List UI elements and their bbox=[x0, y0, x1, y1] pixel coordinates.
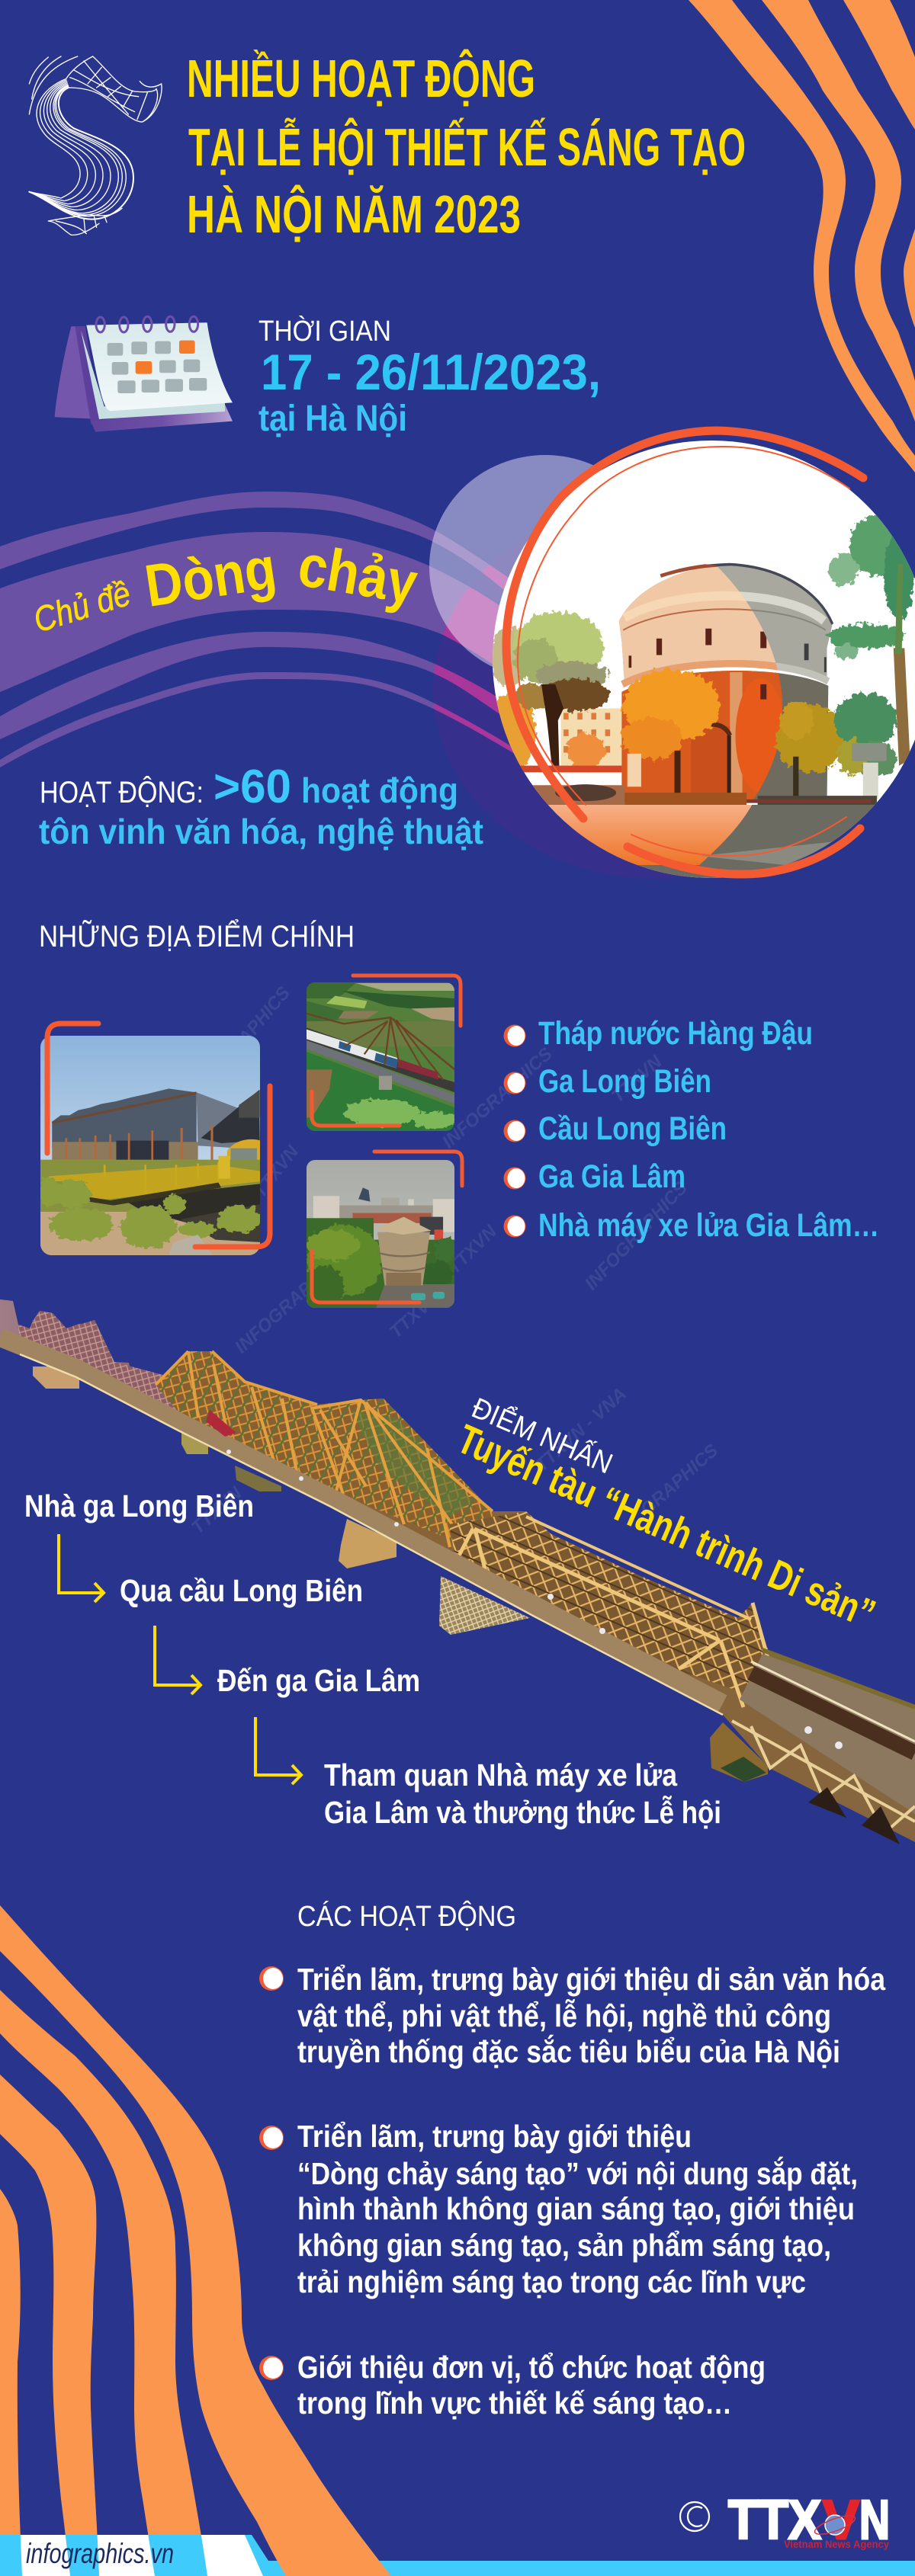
list: main venues: Ga Gia Lâm bbox=[538, 1158, 685, 1195]
watermarks: INFOGRAPHICS bbox=[231, 1248, 349, 1357]
image: Long Bien bridge bbox=[0, 1299, 915, 1844]
logo: TTXVN: N bbox=[859, 2490, 890, 2551]
translucent circle bbox=[429, 455, 661, 679]
icon: calendar bbox=[55, 316, 233, 432]
grass clumps bbox=[39, 1176, 261, 1248]
list: activities: trải nghiệm sáng tạo trong các lĩnh vực bbox=[297, 2264, 806, 2299]
background trees and buildings bbox=[486, 612, 623, 773]
cyclists on deck bbox=[226, 1450, 843, 1749]
list: activities: Triển lãm, trưng bày giới thiệu bbox=[297, 2119, 692, 2154]
dark purple halo behind photo bbox=[433, 501, 878, 879]
decorative stripes top right bbox=[689, 0, 915, 473]
watermarks: TTXVN - VNA bbox=[531, 1384, 631, 1475]
lower field bbox=[307, 1052, 454, 1132]
bridge piers bbox=[33, 1366, 768, 1782]
theme heading: Chủ đề bbox=[29, 573, 135, 640]
list: activities: trong lĩnh vực thiết kế sáng tạo… bbox=[297, 2385, 732, 2421]
logo: TTXVN bbox=[680, 2490, 890, 2551]
bullet bbox=[503, 1168, 526, 1189]
footer strip bbox=[0, 2535, 915, 2576]
theme heading bbox=[29, 531, 422, 640]
near truss bbox=[449, 1511, 769, 1700]
activities count text: hoạt động bbox=[301, 771, 458, 810]
title: NHIỀU HOẠT ĐỘNG bbox=[187, 48, 535, 108]
bullet bbox=[503, 1024, 526, 1047]
deck bbox=[0, 1338, 723, 1715]
activities count text bbox=[39, 761, 483, 851]
train bbox=[307, 1030, 398, 1069]
bullet bbox=[503, 1120, 526, 1142]
text: highlight train route bbox=[451, 1390, 881, 1637]
watermarks bbox=[188, 982, 722, 1538]
route steps with arrows bbox=[24, 1488, 721, 1830]
route steps with arrows: Đến ga Gia Lâm bbox=[217, 1663, 420, 1698]
flowing theme bands bbox=[0, 492, 518, 767]
text: highlight train route: ĐIỂM NHẤN bbox=[467, 1390, 618, 1480]
text block: time and place: 17 - 26/11/2023, bbox=[261, 344, 601, 400]
tower, gray side bbox=[619, 565, 833, 684]
watermarks: TTXVN bbox=[249, 1142, 303, 1202]
route steps with arrows: Tham quan Nhà máy xe lửa bbox=[324, 1757, 678, 1793]
lower truss bbox=[732, 1721, 915, 1833]
list: activities: không gian sáng tạo, sản phẩm sáng tạo, bbox=[297, 2228, 831, 2263]
central truss bbox=[156, 1351, 493, 1555]
footer white block with stripes bbox=[0, 2535, 263, 2576]
list: activities: Giới thiệu đơn vị, tổ chức hoạt động bbox=[297, 2350, 766, 2385]
arrow bbox=[155, 1626, 201, 1694]
route steps with arrows: Qua cầu Long Biên bbox=[120, 1573, 363, 1608]
bridge body bbox=[0, 1299, 915, 1842]
text block: time and place: THỜI GIAN bbox=[258, 315, 391, 348]
watermarks: TTXVN bbox=[188, 1482, 246, 1538]
bullet bbox=[503, 1072, 526, 1094]
arrow bbox=[59, 1534, 104, 1602]
deck bbox=[307, 1040, 454, 1104]
text block: time and place: tại Hà Nội bbox=[258, 399, 407, 439]
photo accents: orange brackets bbox=[47, 976, 462, 1302]
logo: TTXVN: Vietnam News Agency bbox=[784, 2538, 889, 2550]
truss bbox=[307, 1014, 454, 1080]
watermarks: TTXVN bbox=[608, 1051, 666, 1107]
deck end with rail bbox=[740, 1654, 915, 1814]
bullet bbox=[259, 1966, 284, 1991]
watermarks: GRAPHICS bbox=[217, 982, 294, 1070]
list: activities: hình thành không gian sáng tạo, giới thiệu bbox=[297, 2191, 855, 2226]
watermarks: TTXVN bbox=[386, 1286, 445, 1342]
route steps with arrows: Nhà ga Long Biên bbox=[24, 1488, 254, 1523]
icon: festival S logo bbox=[29, 56, 162, 235]
text block: time and place bbox=[258, 315, 601, 439]
activities count text: >60 bbox=[214, 761, 291, 813]
bullet bbox=[503, 1215, 526, 1238]
logo: TTXVN: V bbox=[823, 2490, 859, 2551]
list: main venues bbox=[503, 1015, 879, 1244]
right side trees bbox=[775, 515, 914, 802]
list: activities: truyền thống đặc sắc tiêu biểu của Hà Nội bbox=[297, 2034, 840, 2069]
watermarks: INFOGRAPHICS bbox=[438, 1043, 557, 1152]
theme heading: chảy bbox=[294, 531, 422, 617]
list: activities: vật thể, phi vật thể, lễ hội, nghề thủ công bbox=[297, 1998, 831, 2033]
street bbox=[530, 785, 624, 805]
factory bbox=[52, 1088, 197, 1151]
list: main venues: Ga Long Biên bbox=[538, 1063, 711, 1100]
logo: TTXVN: TTX bbox=[728, 2490, 821, 2551]
photo: Hang Dau water tower bbox=[493, 441, 915, 878]
heading: main venues: NHỮNG ĐỊA ĐIỂM CHÍNH bbox=[39, 918, 355, 953]
watermarks: INFOGRAPHICS bbox=[581, 1177, 692, 1294]
decorative stripes bottom left bbox=[0, 1905, 391, 2576]
activities count text: tôn vinh văn hóa, nghệ thuật bbox=[39, 812, 483, 851]
site credit: infographics.vn bbox=[26, 2538, 174, 2569]
far truss bbox=[18, 1311, 191, 1425]
title bbox=[187, 48, 746, 244]
bullet bbox=[259, 2126, 284, 2150]
list: main venues: Cầu Long Biên bbox=[538, 1110, 727, 1147]
photo: Gia Lam railway factory bbox=[39, 1036, 261, 1256]
orange arcs around photo bbox=[506, 431, 863, 874]
bullet bbox=[259, 2356, 284, 2380]
grounds bbox=[40, 1160, 261, 1256]
activities count text: HOẠT ĐỘNG: bbox=[40, 775, 204, 809]
heading: activities: CÁC HOẠT ĐỘNG bbox=[297, 1899, 516, 1933]
list: main venues: Tháp nước Hàng Đậu bbox=[538, 1015, 813, 1052]
route steps with arrows: Gia Lâm và thưởng thức Lễ hội bbox=[324, 1795, 721, 1830]
watermarks: GRAPHICS bbox=[637, 1440, 722, 1520]
tower, orange tinted side bbox=[619, 564, 782, 802]
list: activities bbox=[259, 1962, 886, 2421]
photo: water tower from above bbox=[303, 1160, 458, 1309]
theme heading: Dòng bbox=[141, 533, 281, 620]
watermarks: TTXVN bbox=[444, 1221, 501, 1278]
copyright mark bbox=[680, 2502, 709, 2531]
globe bbox=[813, 2512, 857, 2538]
photo: Long Bien bridge with train bbox=[307, 982, 455, 1132]
title: HÀ NỘI NĂM 2023 bbox=[187, 184, 521, 244]
tower bbox=[377, 1232, 430, 1286]
arrow bbox=[255, 1717, 301, 1784]
